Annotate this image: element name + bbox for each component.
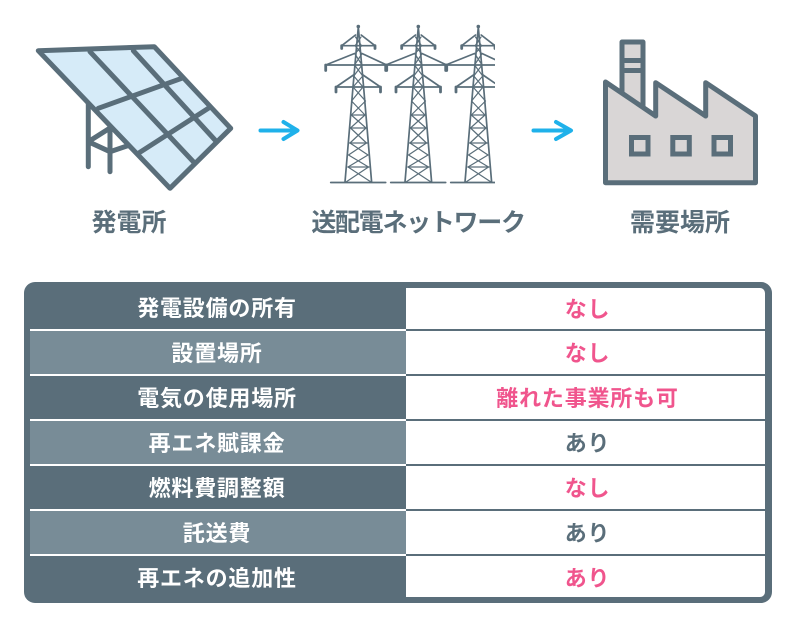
row 7 value: あり <box>565 566 610 591</box>
icon: factory <box>603 40 758 186</box>
comparison table <box>24 282 772 603</box>
row 2 label <box>30 331 406 374</box>
row 7 label: 再エネの追加性 <box>137 566 297 591</box>
row 6 value: あり <box>565 521 610 546</box>
heading: demand site: 需要場所 <box>630 209 730 237</box>
row 4 value: あり <box>565 431 610 456</box>
row 3 value: 離れた事業所も可 <box>496 386 679 411</box>
row 1 value: なし <box>565 297 610 322</box>
row 4 label <box>30 421 406 464</box>
row 3 label: 電気の使用場所 <box>137 386 297 411</box>
row 2 label: 設置場所 <box>171 341 263 366</box>
row 5 label: 燃料費調整額 <box>149 476 285 501</box>
row 1 label: 発電設備の所有 <box>137 296 297 321</box>
row 6 label <box>30 511 406 554</box>
row 6 label: 託送費 <box>183 521 251 546</box>
row 4 label: 再エネ賦課金 <box>149 431 285 456</box>
heading: power plant: 発電所 <box>91 209 166 237</box>
icon: solar panel <box>36 44 234 191</box>
row 5 value: なし <box>565 476 610 501</box>
icon: transmission towers <box>324 24 495 184</box>
arrow: solar to grid <box>258 120 300 142</box>
arrow: grid to factory <box>532 120 574 142</box>
heading: transmission network: 送配電ネットワーク <box>311 209 525 237</box>
row 2 value: なし <box>565 341 610 366</box>
